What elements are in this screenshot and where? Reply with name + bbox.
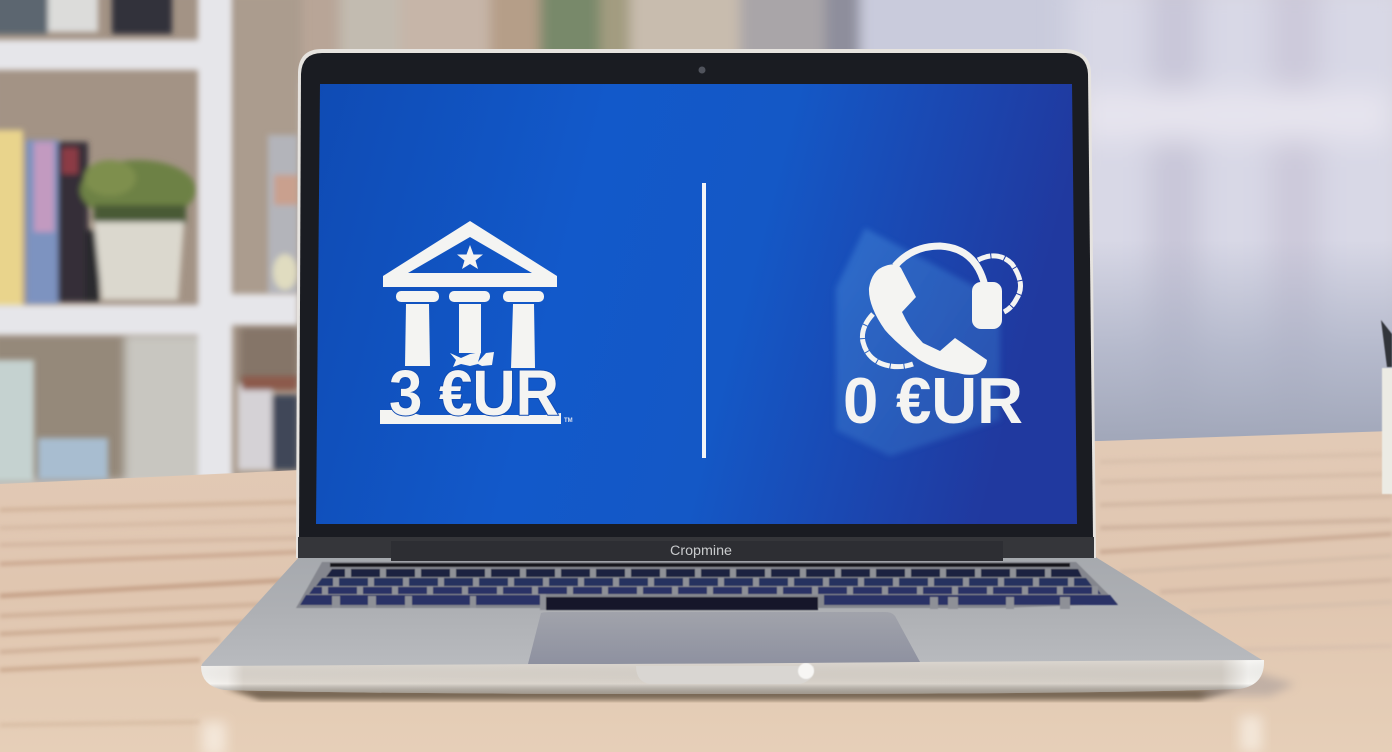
icon: phone handset [869, 264, 987, 375]
cup at right edge [1381, 320, 1392, 494]
shelf boards and upright [0, 40, 205, 70]
bow [450, 352, 494, 367]
laptop [201, 49, 1264, 694]
capitals [396, 291, 439, 302]
laptop base [201, 556, 1264, 694]
top shelf items [0, 0, 48, 34]
plinth [380, 410, 561, 424]
right option: phone headset with 0 EUR [843, 246, 1023, 437]
right panel backdrop [836, 228, 1000, 456]
wooden table [0, 431, 1392, 752]
icon: lower cable loop [862, 314, 913, 367]
books [0, 130, 23, 310]
icon: headset band [895, 246, 985, 286]
trackpad [528, 612, 920, 664]
lid outer frame [296, 49, 1096, 558]
laptop shadow [225, 665, 1295, 700]
price label: 3 €UR [389, 357, 559, 429]
bottom-row gaps [332, 594, 1070, 610]
center divider [702, 183, 706, 458]
front notch [636, 666, 814, 684]
hinge [298, 537, 1094, 561]
icon: bank [380, 221, 561, 424]
keyboard [296, 562, 1118, 610]
columns [405, 304, 430, 366]
left option: bank icon with 3 EUR [380, 221, 573, 429]
brand name: Cropmine [670, 543, 732, 558]
plant [80, 160, 196, 220]
trademark: TM [564, 418, 573, 424]
icon: ear cup [972, 282, 1002, 329]
icon: upper cable loop [978, 256, 1021, 312]
front lip [201, 660, 1264, 694]
price label: 0 €UR [843, 364, 1023, 437]
bookshelf with books and plant [0, 0, 302, 482]
lower shelf items [0, 360, 34, 482]
key gaps [322, 573, 1098, 590]
table reflection highlights under the laptop [202, 722, 226, 752]
background: blurred room wall and curtain [0, 0, 1392, 500]
pot [94, 222, 184, 300]
right-hand ornaments [268, 135, 298, 295]
webcam [698, 66, 706, 74]
star [457, 245, 483, 269]
screen [316, 84, 1077, 524]
lid bezel [299, 53, 1093, 537]
